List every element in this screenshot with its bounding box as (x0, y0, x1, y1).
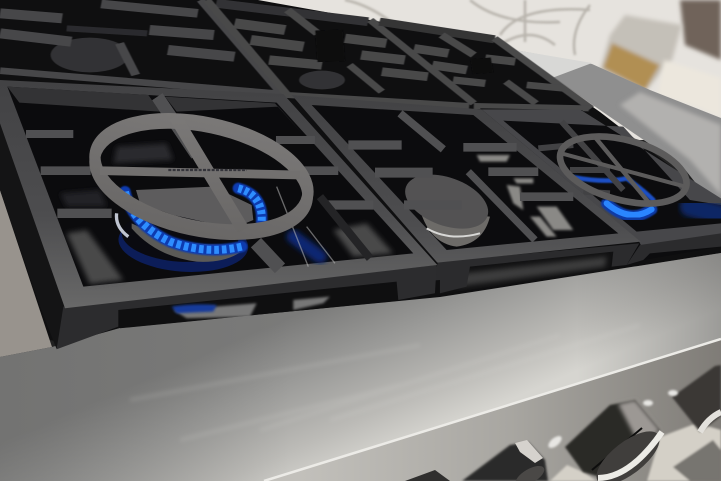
underside gap (118, 280, 440, 328)
reflections (477, 155, 573, 237)
frame top (0, 80, 437, 308)
right steel griddle area (515, 50, 721, 215)
underside and legs (427, 243, 639, 297)
rear left grate (0, 0, 282, 94)
dark cooktop base (0, 0, 721, 350)
left steel strip (0, 190, 52, 357)
burner brass base (420, 210, 490, 247)
white canister (658, 60, 721, 118)
dark cupboard corner (680, 0, 721, 60)
knob: far left (405, 470, 450, 481)
flames (125, 163, 320, 257)
side shadow (0, 123, 65, 349)
wall pattern (345, 0, 590, 55)
burner cap (136, 187, 253, 228)
burner rim (132, 223, 243, 262)
rear centre grate (207, 0, 474, 106)
steel burner glints (277, 187, 335, 267)
control panel (264, 340, 721, 481)
front lip highlight (264, 339, 721, 481)
right grate bars (538, 122, 623, 193)
ring lettering (168, 166, 247, 173)
centre grate (292, 95, 641, 297)
knob: large centre (565, 400, 668, 481)
front face and legs (57, 265, 437, 349)
right grate front face (627, 233, 721, 265)
knob: lower (462, 440, 548, 481)
rear right grate (380, 22, 591, 108)
burner cap (398, 164, 496, 239)
opening (7, 87, 413, 287)
inner walls (7, 87, 303, 135)
left grate (0, 80, 440, 349)
centre bars (348, 113, 573, 240)
right grate (480, 108, 721, 265)
right flame (573, 177, 721, 216)
glass jar (600, 15, 682, 92)
panel lower cream area (550, 423, 721, 481)
knob: far right (672, 365, 721, 432)
rear grates (0, 0, 591, 108)
background wall (0, 0, 721, 140)
grate bars (26, 97, 373, 268)
stainless top surface (0, 253, 721, 481)
small screws (546, 390, 678, 450)
wok ring right (553, 124, 694, 216)
burner base ring (117, 211, 250, 276)
reflections (60, 143, 393, 284)
wok ring left (84, 101, 319, 252)
